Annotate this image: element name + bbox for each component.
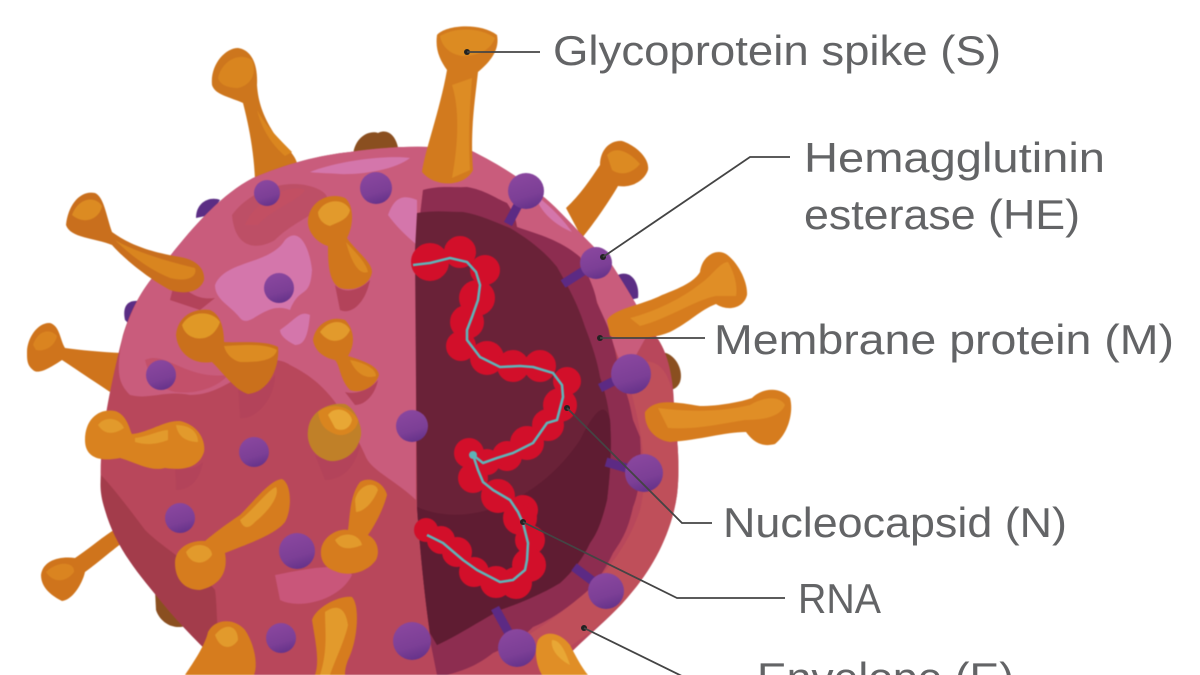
spike: lower body small <box>321 480 387 574</box>
protein stems <box>495 190 643 648</box>
spike: right long <box>607 252 747 339</box>
virus illustration <box>27 26 791 675</box>
label: RNA: RNA <box>798 575 881 622</box>
spike: upper left <box>212 48 297 180</box>
RNA red capsid beads <box>413 238 579 597</box>
lower tone patches <box>275 567 352 604</box>
body base shape <box>101 147 678 675</box>
spike: upper right <box>566 141 648 238</box>
spike: top (S) <box>422 26 498 183</box>
label: Envelope (E) <box>581 625 1014 675</box>
label: RNA <box>520 519 881 622</box>
spikes behind the body <box>27 48 681 627</box>
spike: left on body <box>66 193 204 292</box>
label: Hemagglutinin esterase (HE): esterase (HE) <box>804 191 1080 238</box>
shade patches on upper body <box>232 184 327 246</box>
upper pink tone <box>119 147 650 500</box>
spike: lower left <box>41 530 122 601</box>
spike: large lower body <box>175 479 290 590</box>
spike: center head-on <box>308 404 361 461</box>
cutaway interior <box>413 187 641 675</box>
brown protein bumps behind body <box>155 132 681 627</box>
spike: left horizontal <box>85 410 204 469</box>
spike: bottom middle <box>312 597 357 675</box>
spike: center left <box>176 310 278 394</box>
spike: bottom right <box>536 634 588 675</box>
labels and leader lines <box>464 27 1174 675</box>
right rim lower <box>520 361 678 660</box>
purple bumps behind body <box>124 199 638 325</box>
dark lower-left shade <box>100 475 232 675</box>
label: Hemagglutinin esterase (HE) <box>600 134 1105 260</box>
spike: center right <box>313 319 379 391</box>
spike: lower right long <box>645 390 791 445</box>
rim highlight <box>535 195 572 232</box>
virus body <box>100 147 678 675</box>
spike: upper middle <box>308 196 372 289</box>
spike: left middle <box>27 323 122 392</box>
label: Glycoprotein spike (S): Glycoprotein spike (S) <box>553 27 1001 74</box>
label: Nucleocapsid (N) <box>564 405 1067 546</box>
surface purple proteins <box>146 172 431 660</box>
light pink patches <box>215 235 312 321</box>
surface spikes <box>66 26 791 675</box>
membrane layer <box>416 187 641 675</box>
darkest lower cavity <box>417 410 611 645</box>
label: Hemagglutinin esterase (HE): Hemagglutinin <box>804 134 1105 181</box>
spike shadows on body <box>170 280 378 490</box>
HE proteins on the rim <box>495 173 663 667</box>
protein heads <box>498 173 663 667</box>
dark nucleocapsid cavity <box>415 211 611 645</box>
label: Membrane protein (M): Membrane protein (M) <box>714 316 1174 363</box>
RNA strand <box>413 258 563 582</box>
label: Nucleocapsid (N): Nucleocapsid (N) <box>723 499 1067 546</box>
spike: bottom left <box>185 621 256 675</box>
